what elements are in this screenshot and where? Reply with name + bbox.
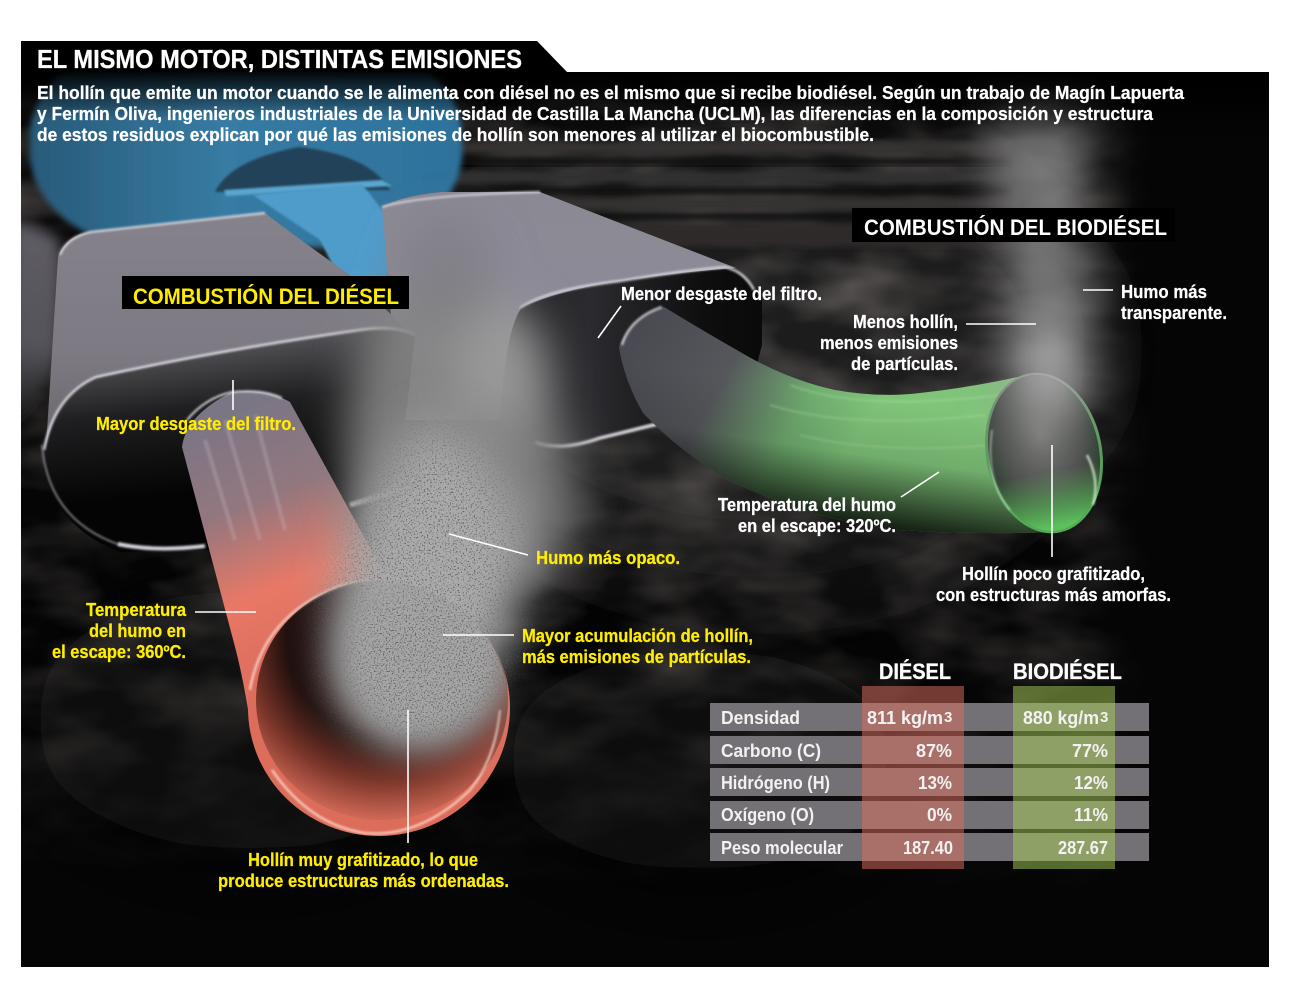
callout: humo más opaco bbox=[449, 534, 680, 568]
title: EL MISMO MOTOR, DISTINTAS EMISIONES bbox=[37, 44, 522, 74]
rims bbox=[382, 192, 754, 446]
row labels: Peso molecular bbox=[721, 838, 843, 858]
callout: humo más transparente: Humo más bbox=[1121, 282, 1207, 302]
callout: temperatura biodiésel: en el escape: 320ºC. bbox=[738, 516, 896, 536]
callout: mayor desgaste del filtro: Mayor desgaste del filtro. bbox=[96, 414, 296, 434]
callout: mayor acumulación de hollín: Mayor acumulación de hollín, bbox=[522, 626, 753, 646]
diésel values: 0% bbox=[927, 805, 952, 825]
muffler: biodiesel side bbox=[382, 192, 762, 446]
table rows bbox=[710, 703, 1149, 861]
callout: temperatura diésel: Temperatura bbox=[86, 600, 187, 620]
pipe mouth bbox=[972, 362, 1116, 544]
callout: temperatura diésel: el escape: 360ºC. bbox=[52, 642, 186, 662]
illustration: motor in blue bbox=[21, 42, 1269, 290]
biodiésel values bbox=[1023, 708, 1108, 858]
pipe: biodiesel, green tail bbox=[619, 307, 1116, 544]
row labels: Hidrógeno (H) bbox=[721, 773, 830, 793]
row labels: Carbono (C) bbox=[721, 741, 821, 761]
callout: humo más transparente bbox=[1083, 282, 1227, 323]
diésel values: 87% bbox=[916, 741, 952, 761]
callout: menor desgaste del filtro: Menor desgaste del filtro. bbox=[621, 284, 822, 304]
heading: diesel combustion: COMBUSTIÓN DEL DIÉSEL bbox=[133, 284, 399, 309]
callout: temperatura diésel bbox=[52, 600, 256, 662]
table headers bbox=[879, 659, 1122, 684]
intro text: de estos residuos explican por qué las emisiones de hollín son menores al utilizar el biocombustible. bbox=[37, 125, 874, 145]
callout: menos hollín: de partículas. bbox=[851, 354, 958, 374]
callout: menos hollín bbox=[820, 312, 1036, 374]
callout: temperatura biodiésel: Temperatura del humo bbox=[718, 495, 896, 515]
row labels: Densidad bbox=[721, 708, 800, 728]
callout: hollín poco grafitizado bbox=[936, 445, 1171, 605]
callout: hollín muy grafitizado: produce estructuras más ordenadas. bbox=[218, 871, 509, 891]
intro text: El hollín que emite un motor cuando se le alimenta con diésel no es el mismo que si recibe biodiésel. Según un trabajo de Magín Lapuerta bbox=[37, 83, 1185, 103]
biodiésel values: 880 kg/m bbox=[1023, 708, 1099, 728]
biodiésel values: 3 bbox=[1100, 709, 1108, 726]
pipe mouth bbox=[248, 580, 510, 836]
callout: hollín poco grafitizado: Hollín poco grafitizado, bbox=[962, 564, 1145, 584]
diésel values: 811 kg/m bbox=[867, 708, 943, 728]
title tab bbox=[21, 41, 567, 72]
muffler: diesel side bbox=[10, 213, 415, 552]
callout: mayor acumulación de hollín: más emisiones de partículas. bbox=[522, 647, 751, 667]
row labels bbox=[721, 708, 843, 858]
biodiésel values: 11% bbox=[1074, 805, 1108, 825]
background: blurred texture and stripes bbox=[21, 86, 1142, 868]
callout: humo más transparente: transparente. bbox=[1121, 303, 1227, 323]
callout: menor desgaste del filtro bbox=[598, 284, 822, 338]
table headers: DIÉSEL bbox=[879, 659, 951, 684]
intro text: y Fermín Oliva, ingenieros industriales de la Universidad de Castilla La Mancha (UCLM), las diferencias en la composición y estructura bbox=[37, 104, 1154, 124]
diésel values: 187.40 bbox=[903, 838, 953, 858]
callout: temperatura biodiésel bbox=[718, 472, 939, 536]
callout: temperatura diésel: del humo en bbox=[89, 621, 186, 641]
diésel values: 3 bbox=[944, 709, 952, 726]
diésel values: 13% bbox=[918, 773, 952, 793]
callout: hollín muy grafitizado bbox=[218, 710, 509, 891]
biodiésel values: 12% bbox=[1074, 773, 1108, 793]
heading: biodiesel combustion: COMBUSTIÓN DEL BIODIÉSEL bbox=[864, 215, 1167, 240]
callout: hollín poco grafitizado: con estructuras más amorfas. bbox=[936, 585, 1171, 605]
biodiésel values: 287.67 bbox=[1058, 838, 1108, 858]
smoke: diesel, dense and speckled bbox=[334, 213, 590, 744]
callout: menos hollín: menos emisiones bbox=[820, 333, 958, 353]
callout: humo más opaco: Humo más opaco. bbox=[536, 548, 680, 568]
table headers: BIODIÉSEL bbox=[1013, 659, 1122, 684]
comparison table bbox=[710, 659, 1149, 869]
diésel values bbox=[867, 708, 953, 858]
biodiésel values: 77% bbox=[1072, 741, 1108, 761]
callout: mayor acumulación de hollín bbox=[443, 626, 753, 667]
pipe: diesel, red tail bbox=[182, 391, 510, 836]
callout: hollín muy grafitizado: Hollín muy grafitizado, lo que bbox=[248, 850, 478, 870]
intro text bbox=[37, 83, 1185, 145]
table columns bbox=[862, 686, 1115, 869]
row labels: Oxígeno (O) bbox=[721, 805, 814, 825]
smoke: biodiesel, faint plume bbox=[985, 120, 1092, 422]
callout: menos hollín: Menos hollín, bbox=[853, 312, 958, 332]
heading: biodiesel combustion bbox=[852, 208, 1175, 242]
